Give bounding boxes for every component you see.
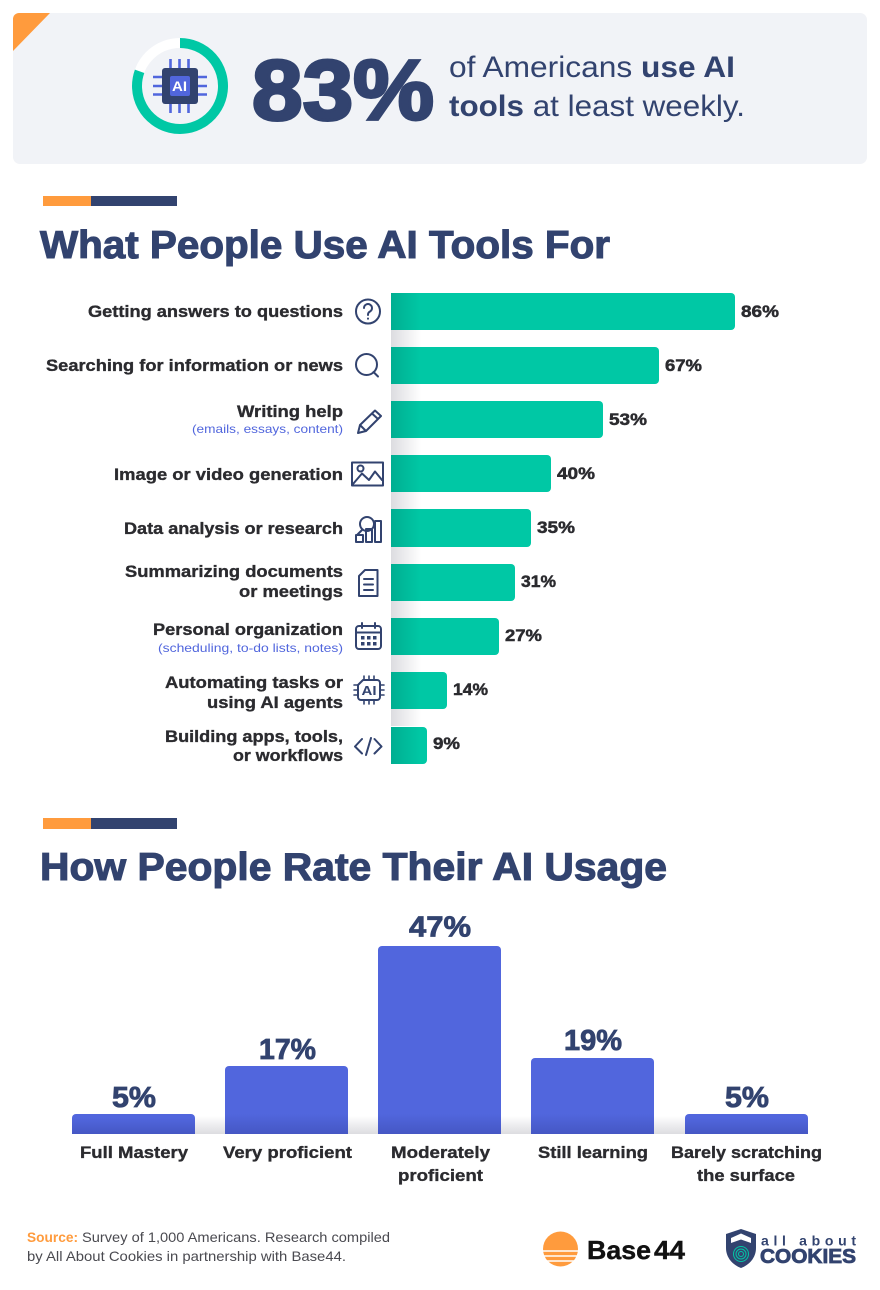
- row: building apps: Building apps, tools,: [165, 727, 343, 746]
- row: automating tasks: 14%: [453, 680, 488, 699]
- row: searching: [46, 347, 702, 384]
- row: automating tasks: AI: [362, 683, 376, 698]
- row: personal organization: 27%: [505, 626, 542, 645]
- row: personal organization: (scheduling, to-do lists, notes): [158, 641, 343, 655]
- column: very proficient: [223, 1034, 352, 1162]
- source note: by All About Cookies in partnership with Base44.: [27, 1248, 346, 1264]
- row: building apps: or workflows: [233, 746, 343, 765]
- source note: Survey of 1,000 Americans. Research compiled: [82, 1229, 390, 1245]
- row: summarizing: [125, 562, 556, 601]
- column: barely scratching the surface: Barely scratching: [671, 1143, 822, 1162]
- row: automating tasks: [165, 672, 488, 712]
- column: barely scratching the surface: 5%: [725, 1082, 769, 1114]
- row: writing help: 53%: [609, 410, 647, 429]
- row: personal organization: [153, 618, 542, 655]
- row: summarizing: 31%: [521, 572, 556, 591]
- section accent bar: [43, 196, 177, 206]
- column: full mastery: Full Mastery: [80, 1143, 189, 1162]
- logo: Base44: Base: [587, 1235, 651, 1265]
- row: summarizing: or meetings: [239, 582, 343, 601]
- row: image or video: 40%: [557, 464, 595, 483]
- logo: All About Cookies: COOKIES: [760, 1246, 856, 1268]
- heading: what people use AI tools for: What People Use AI Tools For: [40, 224, 610, 267]
- icon: AI chip in progress ring: [137, 43, 223, 129]
- chart: self-rated proficiency columns: [72, 912, 822, 1185]
- row: building apps: [165, 727, 460, 765]
- column: full mastery: [72, 1082, 195, 1162]
- column: barely scratching the surface: the surface: [697, 1166, 795, 1185]
- baseline shadows: [195, 1116, 685, 1134]
- row: automating tasks: Automating tasks or: [165, 673, 343, 692]
- logo: Base44: 44: [654, 1235, 686, 1265]
- column: still learning: 19%: [564, 1025, 622, 1057]
- column: very proficient: Very proficient: [223, 1143, 352, 1162]
- column: still learning: [531, 1025, 654, 1162]
- corner accent: [13, 13, 50, 51]
- row: summarizing: Summarizing documents: [125, 562, 343, 581]
- row: getting answers: [88, 293, 779, 330]
- chart: AI tool uses horizontal bars: [46, 293, 779, 765]
- column: moderately proficient: Moderately: [391, 1143, 491, 1162]
- row: writing help: Writing help: [237, 402, 343, 421]
- row: image or video: [114, 455, 595, 492]
- column: full mastery: 5%: [112, 1082, 156, 1114]
- icon: AI chip in progress ring: AI: [172, 78, 187, 94]
- row: searching: Searching for information or news: [46, 356, 343, 375]
- logo: All About Cookies: [726, 1229, 856, 1268]
- headline text: tools at least weekly.: [449, 90, 745, 123]
- row: data analysis: Data analysis or research: [124, 519, 343, 538]
- panel: headline stat: [13, 13, 867, 164]
- headline text: of Americans use AI: [449, 51, 735, 84]
- heading: how people rate their AI usage: How People Rate Their AI Usage: [40, 846, 667, 889]
- column: moderately proficient: proficient: [398, 1166, 483, 1185]
- row: getting answers: 86%: [741, 302, 779, 321]
- bar shadows: [391, 330, 421, 726]
- logo: Base44: [542, 1232, 686, 1266]
- row: writing help: (emails, essays, content): [192, 422, 343, 436]
- headline number: 83%: [252, 44, 434, 138]
- column: still learning: Still learning: [538, 1143, 648, 1162]
- row: searching: 67%: [665, 356, 702, 375]
- headline text: [449, 51, 745, 123]
- row: building apps: 9%: [433, 734, 460, 753]
- column: barely scratching the surface: [671, 1082, 822, 1185]
- column: moderately proficient: [378, 912, 501, 1185]
- section accent bar: [43, 818, 177, 829]
- row: data analysis: 35%: [537, 518, 575, 537]
- row: data analysis: [124, 509, 575, 547]
- column: moderately proficient: 47%: [409, 912, 471, 944]
- logo: All About Cookies: all about: [761, 1232, 856, 1248]
- source note: [27, 1229, 390, 1264]
- source note: Source:: [27, 1229, 78, 1245]
- row: getting answers: Getting answers to questions: [88, 302, 343, 321]
- row: writing help: [192, 401, 647, 438]
- column: very proficient: 17%: [259, 1034, 316, 1066]
- row: image or video: Image or video generation: [114, 465, 343, 484]
- row: personal organization: Personal organization: [153, 620, 343, 639]
- row: automating tasks: using AI agents: [207, 693, 343, 712]
